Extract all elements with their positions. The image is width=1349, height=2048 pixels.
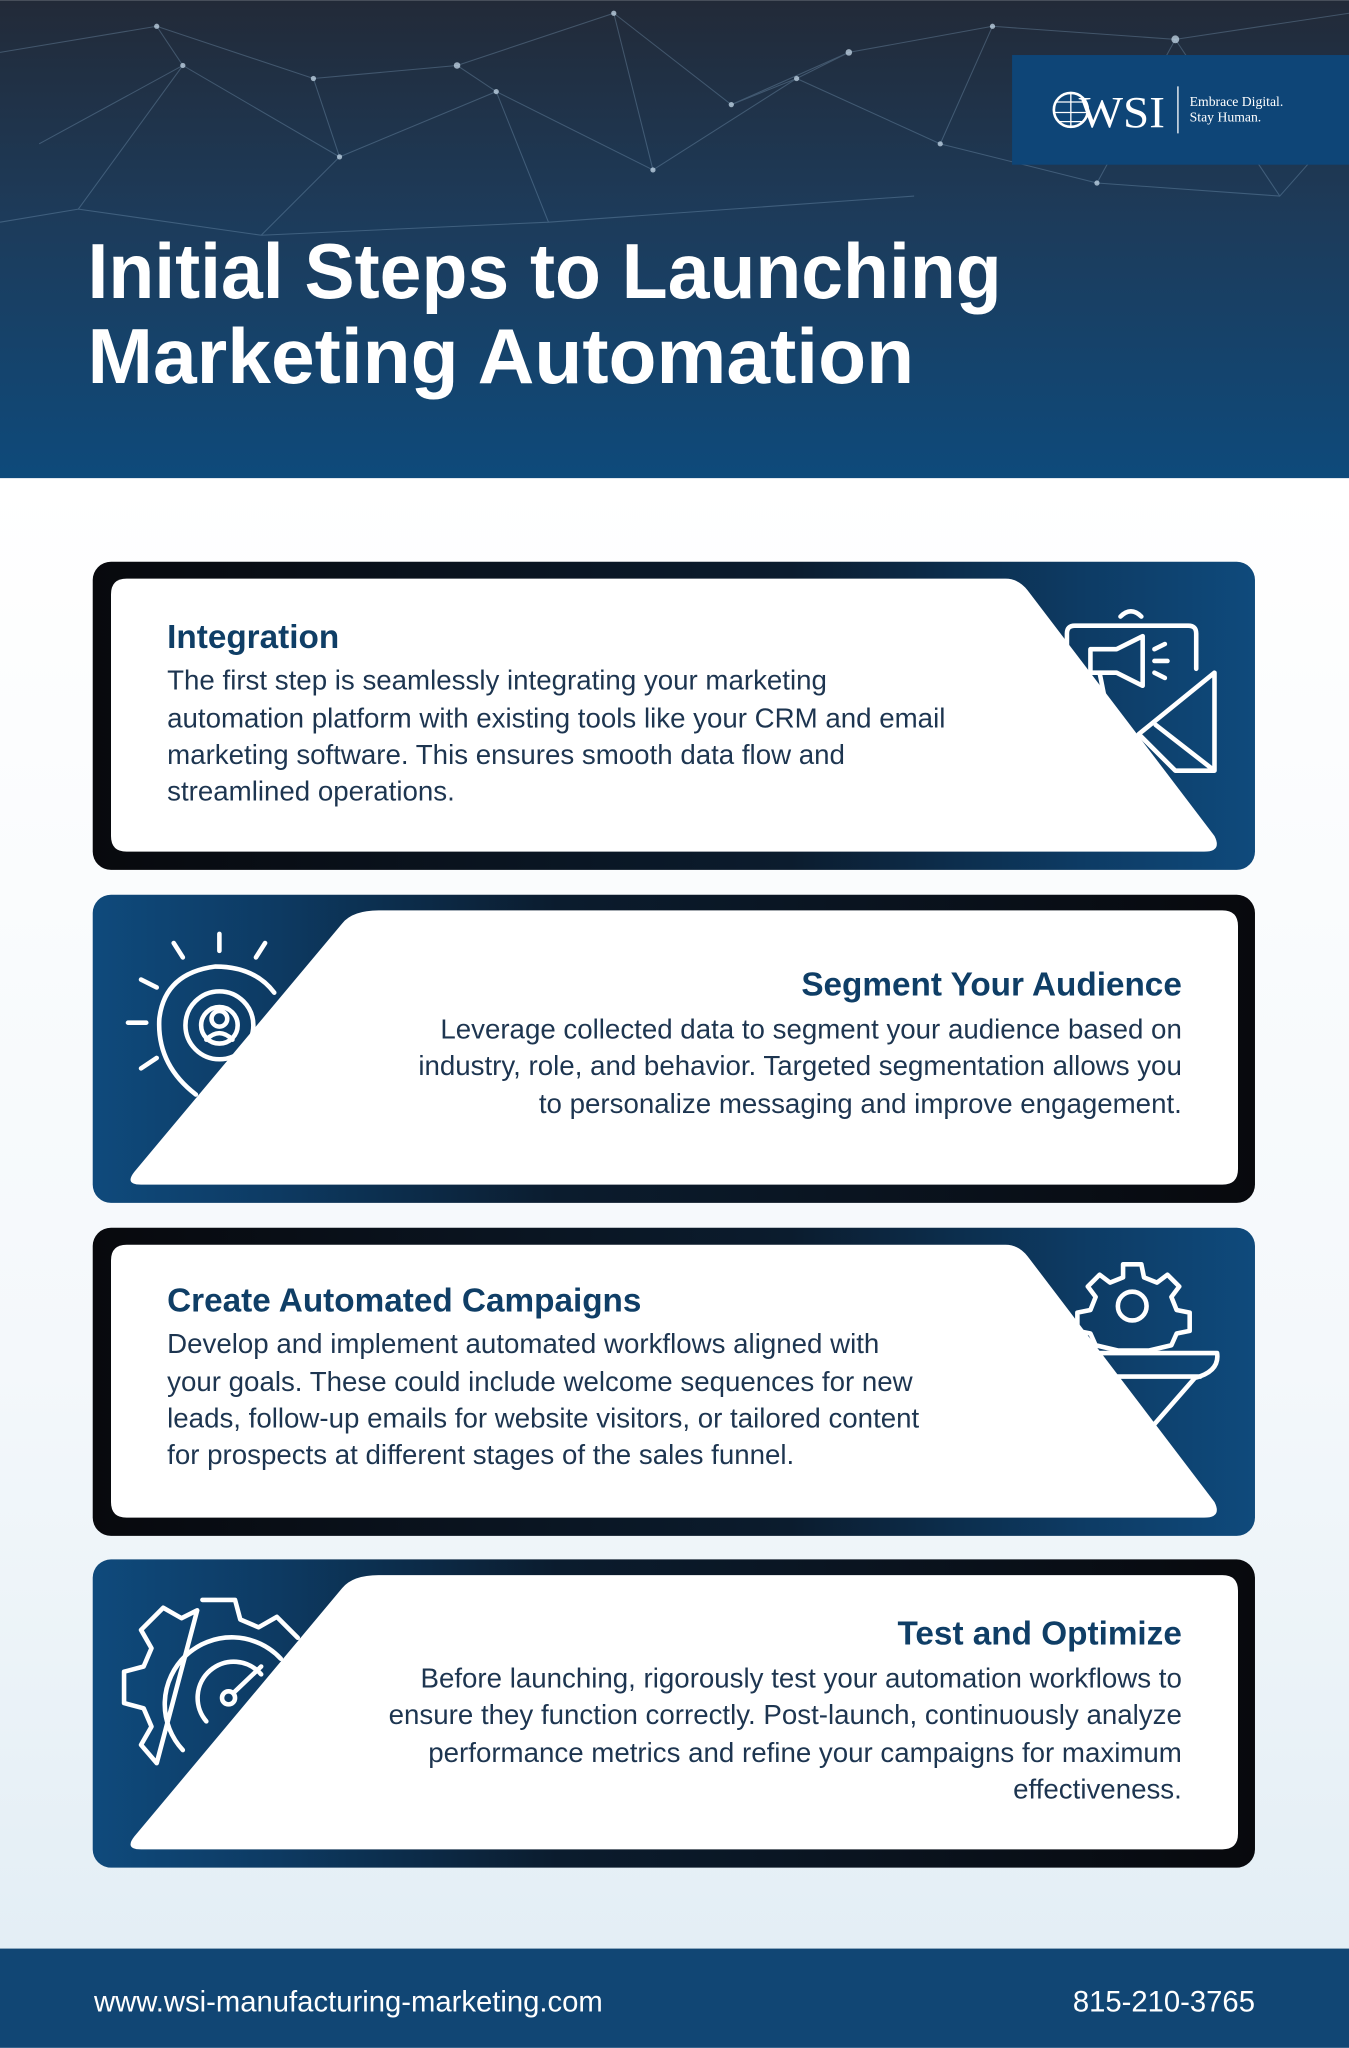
card: Integration: marketing software. This ensures smooth data flow and bbox=[167, 739, 845, 770]
logo box: WSI bbox=[1079, 87, 1165, 137]
icon: gear speedometer bbox=[124, 1600, 298, 1763]
card: Integration: The first step is seamlessly integrating your marketing bbox=[167, 665, 827, 696]
card: Create Automated Campaigns: leads, follow-up emails for website visitors, or tailored content bbox=[167, 1403, 920, 1434]
card: Test and Optimize: Before launching, rigorously test your automation workflows to bbox=[420, 1662, 1182, 1693]
card: Create Automated Campaigns: Create Automated Campaigns bbox=[167, 1282, 641, 1319]
card: Segment Your Audience: Segment Your Audience bbox=[801, 966, 1182, 1003]
icon: megaphone envelope bbox=[1067, 611, 1214, 771]
card: Test and Optimize bbox=[93, 1559, 1255, 1868]
card: Integration: streamlined operations. bbox=[167, 776, 455, 807]
footer: www.wsi-manufacturing-marketing.com bbox=[93, 1986, 603, 2018]
title: Initial Steps to Launching bbox=[87, 227, 1002, 315]
header band bbox=[0, 0, 1349, 478]
title bbox=[87, 227, 1002, 400]
footer: 815-210-3765 bbox=[1073, 1986, 1255, 2018]
card: Integration: automation platform with existing tools like your CRM and email bbox=[167, 703, 945, 734]
card: Segment Your Audience: industry, role, and behavior. Targeted segmentation allows you bbox=[418, 1050, 1182, 1081]
card: Segment Your Audience: Leverage collected data to segment your audience based on bbox=[440, 1013, 1182, 1044]
card: Integration: Integration bbox=[167, 619, 339, 656]
card: Segment Your Audience bbox=[93, 895, 1255, 1203]
title: Marketing Automation bbox=[87, 312, 914, 400]
card: Create Automated Campaigns: Develop and implement automated workflows aligned with bbox=[167, 1328, 879, 1359]
icon: lightbulb person bbox=[128, 934, 274, 1095]
card: Create Automated Campaigns bbox=[93, 1228, 1255, 1536]
logo box: Stay Human. bbox=[1190, 110, 1261, 125]
card: Create Automated Campaigns: for prospects at different stages of the sales funnel. bbox=[167, 1439, 794, 1470]
card: Test and Optimize: performance metrics and refine your campaigns for maximum bbox=[428, 1737, 1182, 1768]
page background bbox=[0, 478, 1349, 1954]
card: Segment Your Audience: to personalize messaging and improve engagement. bbox=[539, 1088, 1182, 1119]
icon: gear funnel bbox=[1077, 1264, 1217, 1430]
card: Test and Optimize: effectiveness. bbox=[1013, 1773, 1182, 1804]
card: Create Automated Campaigns: your goals. These could include welcome sequences for new bbox=[167, 1366, 914, 1397]
logo box: Embrace Digital. bbox=[1190, 94, 1283, 109]
logo box bbox=[1012, 55, 1349, 165]
footer bbox=[0, 1949, 1349, 2048]
card: Integration bbox=[93, 562, 1255, 870]
card: Test and Optimize: Test and Optimize bbox=[898, 1615, 1182, 1652]
card: Test and Optimize: ensure they function correctly. Post-launch, continuously analyze bbox=[389, 1699, 1182, 1730]
